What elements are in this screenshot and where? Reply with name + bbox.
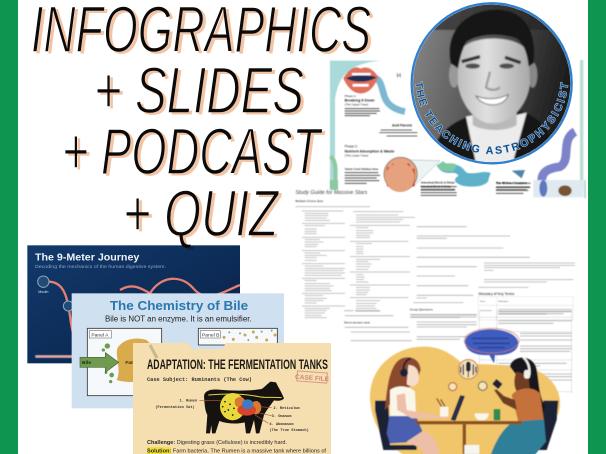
infographic bottom strip: The 48-Hour Completion bbox=[496, 181, 527, 185]
microphone badge bbox=[459, 360, 478, 379]
speech bubble bbox=[464, 328, 519, 363]
abomasum label: 4. Abomasum bbox=[269, 422, 294, 427]
podcast illustration bbox=[370, 328, 560, 454]
slide title: ADAPTATION: THE FERMENTATION TANKS bbox=[147, 356, 328, 372]
true stomach label: (The True Stomach) bbox=[269, 428, 309, 433]
essay text bbox=[410, 315, 477, 317]
line: + QUIZ: + QUIZ bbox=[123, 176, 280, 250]
left speaker bbox=[385, 357, 448, 454]
case file background bbox=[133, 343, 331, 454]
cow diagram bbox=[204, 382, 284, 433]
teal left edge bbox=[330, 61, 382, 190]
stomach node bbox=[63, 301, 73, 311]
ring bbox=[412, 3, 572, 163]
essay heading: Essay Questions bbox=[410, 308, 433, 312]
infographic bottom strip bbox=[330, 163, 585, 198]
social icon left bbox=[449, 383, 457, 391]
phase 1 text: (The Upper Tract) bbox=[345, 102, 368, 106]
right edge strip bbox=[580, 60, 583, 190]
table leg bbox=[463, 424, 466, 454]
quiz column two bbox=[350, 212, 415, 311]
cup with pencils bbox=[437, 398, 448, 417]
phase 1 text: Phase 1: bbox=[345, 94, 357, 98]
caption: 48-hour bbox=[496, 181, 531, 190]
leader labels bbox=[155, 400, 309, 433]
reticulum bbox=[235, 397, 245, 408]
slide background bbox=[27, 245, 240, 363]
large intestine bbox=[542, 132, 575, 187]
table top bbox=[415, 421, 522, 424]
circular caption: THE TEACHING ASTROPHYSICIST bbox=[414, 81, 568, 154]
glossary table: Term bbox=[480, 301, 485, 303]
tablet bbox=[452, 396, 464, 420]
solution highlight bbox=[147, 447, 171, 454]
slide subtitle: Decoding the mechanics of the human digestive system. bbox=[35, 264, 166, 269]
green border right bbox=[588, 0, 606, 454]
omasum bbox=[251, 401, 261, 414]
cow silhouette bbox=[204, 382, 284, 433]
short answer lines bbox=[344, 311, 477, 341]
slide title: The Chemistry of Bile bbox=[110, 298, 248, 313]
phase 2 text: Nutrient Absorption & Waste bbox=[345, 149, 394, 153]
glossary table bbox=[478, 297, 573, 320]
line: + SLIDES: + SLIDES bbox=[94, 53, 304, 127]
acid parcels text: Acid Parcels bbox=[392, 124, 412, 128]
slide: Adaptation, The Fermentation Tanks bbox=[133, 343, 331, 454]
right chair bbox=[517, 401, 558, 450]
rumen bbox=[220, 393, 245, 420]
abomasum bbox=[237, 404, 256, 416]
digestive route line bbox=[48, 279, 240, 347]
phase 1 text: Breaking It Down bbox=[345, 98, 375, 102]
line: + SLIDES: + SLIDES bbox=[97, 55, 307, 129]
small intestine bbox=[440, 163, 489, 178]
omasum label: 3. Omasum bbox=[272, 415, 292, 419]
slide subtitle: Bile is NOT an enzyme. It is an emulsifier. bbox=[105, 315, 252, 324]
section heading: Multiple Choice Quiz bbox=[295, 199, 324, 203]
quiz column one bbox=[302, 211, 345, 318]
infographic page: digestive system bbox=[330, 60, 583, 191]
case subject: Case Subject: Ruminants (The Cow) bbox=[147, 376, 252, 383]
challenge text: Challenge: Digesting grass (Cellulose) is incredibly hard. bbox=[147, 440, 287, 446]
panel A: Fat bbox=[125, 360, 133, 366]
mouth illustration bbox=[343, 67, 378, 93]
slide background bbox=[72, 293, 284, 408]
instructions line bbox=[295, 205, 370, 208]
phase 1 text bbox=[345, 94, 380, 116]
line: + QUIZ: + QUIZ bbox=[126, 178, 283, 252]
social icon right bbox=[478, 382, 487, 390]
acid parcels text bbox=[379, 124, 417, 136]
progress bar bbox=[35, 355, 73, 358]
line: INFOGRAPHICS bbox=[31, 0, 374, 68]
slide title: The 9-Meter Journey bbox=[35, 253, 140, 264]
fermentation vat label: (Fermentation Vat) bbox=[155, 405, 195, 410]
triangle organ bbox=[512, 170, 525, 178]
rumen spots bbox=[223, 400, 236, 415]
paper clip bbox=[150, 345, 157, 358]
title text bbox=[31, 0, 374, 252]
leader lines bbox=[199, 400, 272, 423]
caption: 48-hour: The 48-Hour Completion bbox=[496, 181, 531, 185]
yellow heart background bbox=[370, 347, 560, 454]
slide: The 9-Meter Journey bbox=[27, 245, 240, 363]
infographic bottom strip: Intestinal Block & Relax bbox=[421, 184, 451, 188]
green tube left bbox=[330, 157, 336, 190]
phase 2 text: (The Lower Tract) bbox=[345, 154, 368, 158]
caption: villi bbox=[421, 181, 457, 189]
study guide document bbox=[295, 163, 585, 320]
green border left bbox=[0, 0, 18, 454]
heading fragments: H bbox=[397, 73, 401, 79]
panel A: Bile bbox=[82, 360, 91, 366]
answer key paragraph bbox=[413, 263, 575, 303]
right speaker bbox=[490, 357, 546, 454]
case file stamp: CASE FILE bbox=[295, 374, 330, 383]
green can bbox=[494, 409, 500, 420]
line: + PODCAST: + PODCAST bbox=[62, 114, 323, 188]
villi magnifier bbox=[384, 157, 440, 191]
rumen label: 1. Rumen bbox=[180, 400, 197, 404]
lower page continuation bbox=[344, 310, 572, 393]
glossary heading: Glossary of Key Terms bbox=[478, 292, 514, 296]
short answer column bbox=[417, 227, 530, 298]
photo bbox=[410, 0, 573, 167]
panel B bbox=[198, 328, 277, 345]
phase 2 text: Tennis Court Surface Area bbox=[345, 167, 378, 171]
glossary table rows bbox=[479, 310, 572, 393]
line: + PODCAST: + PODCAST bbox=[65, 116, 326, 190]
line: + PODCAST bbox=[62, 114, 326, 190]
panel B: Panel B bbox=[202, 332, 220, 338]
phase 2 text: Phase 2: bbox=[345, 145, 358, 149]
white bag bbox=[464, 445, 479, 454]
mouth node: Mouth bbox=[38, 290, 48, 294]
bowl bbox=[474, 413, 489, 420]
blue chamber bbox=[242, 399, 253, 409]
glossary table: Definition bbox=[498, 300, 509, 303]
mouth node bbox=[38, 276, 49, 294]
panel A: Panel A bbox=[91, 332, 109, 338]
portrait circle: The Teaching Astrophysicist bbox=[410, 2, 573, 164]
caption: villi: Intestinal Block & Relax bbox=[421, 181, 455, 185]
panel A bbox=[80, 328, 162, 396]
study guide title: Study Guide for Massive Stars bbox=[295, 190, 368, 196]
esophagus tube bbox=[373, 77, 405, 112]
read aloud heading: Short-answer task bbox=[344, 320, 370, 324]
reticulum label: 2. Reticulum bbox=[273, 406, 300, 411]
phase 2 text bbox=[345, 145, 394, 183]
left chair bbox=[375, 401, 417, 450]
slide: The Chemistry of Bile bbox=[72, 293, 284, 408]
back highlight bbox=[208, 394, 282, 398]
